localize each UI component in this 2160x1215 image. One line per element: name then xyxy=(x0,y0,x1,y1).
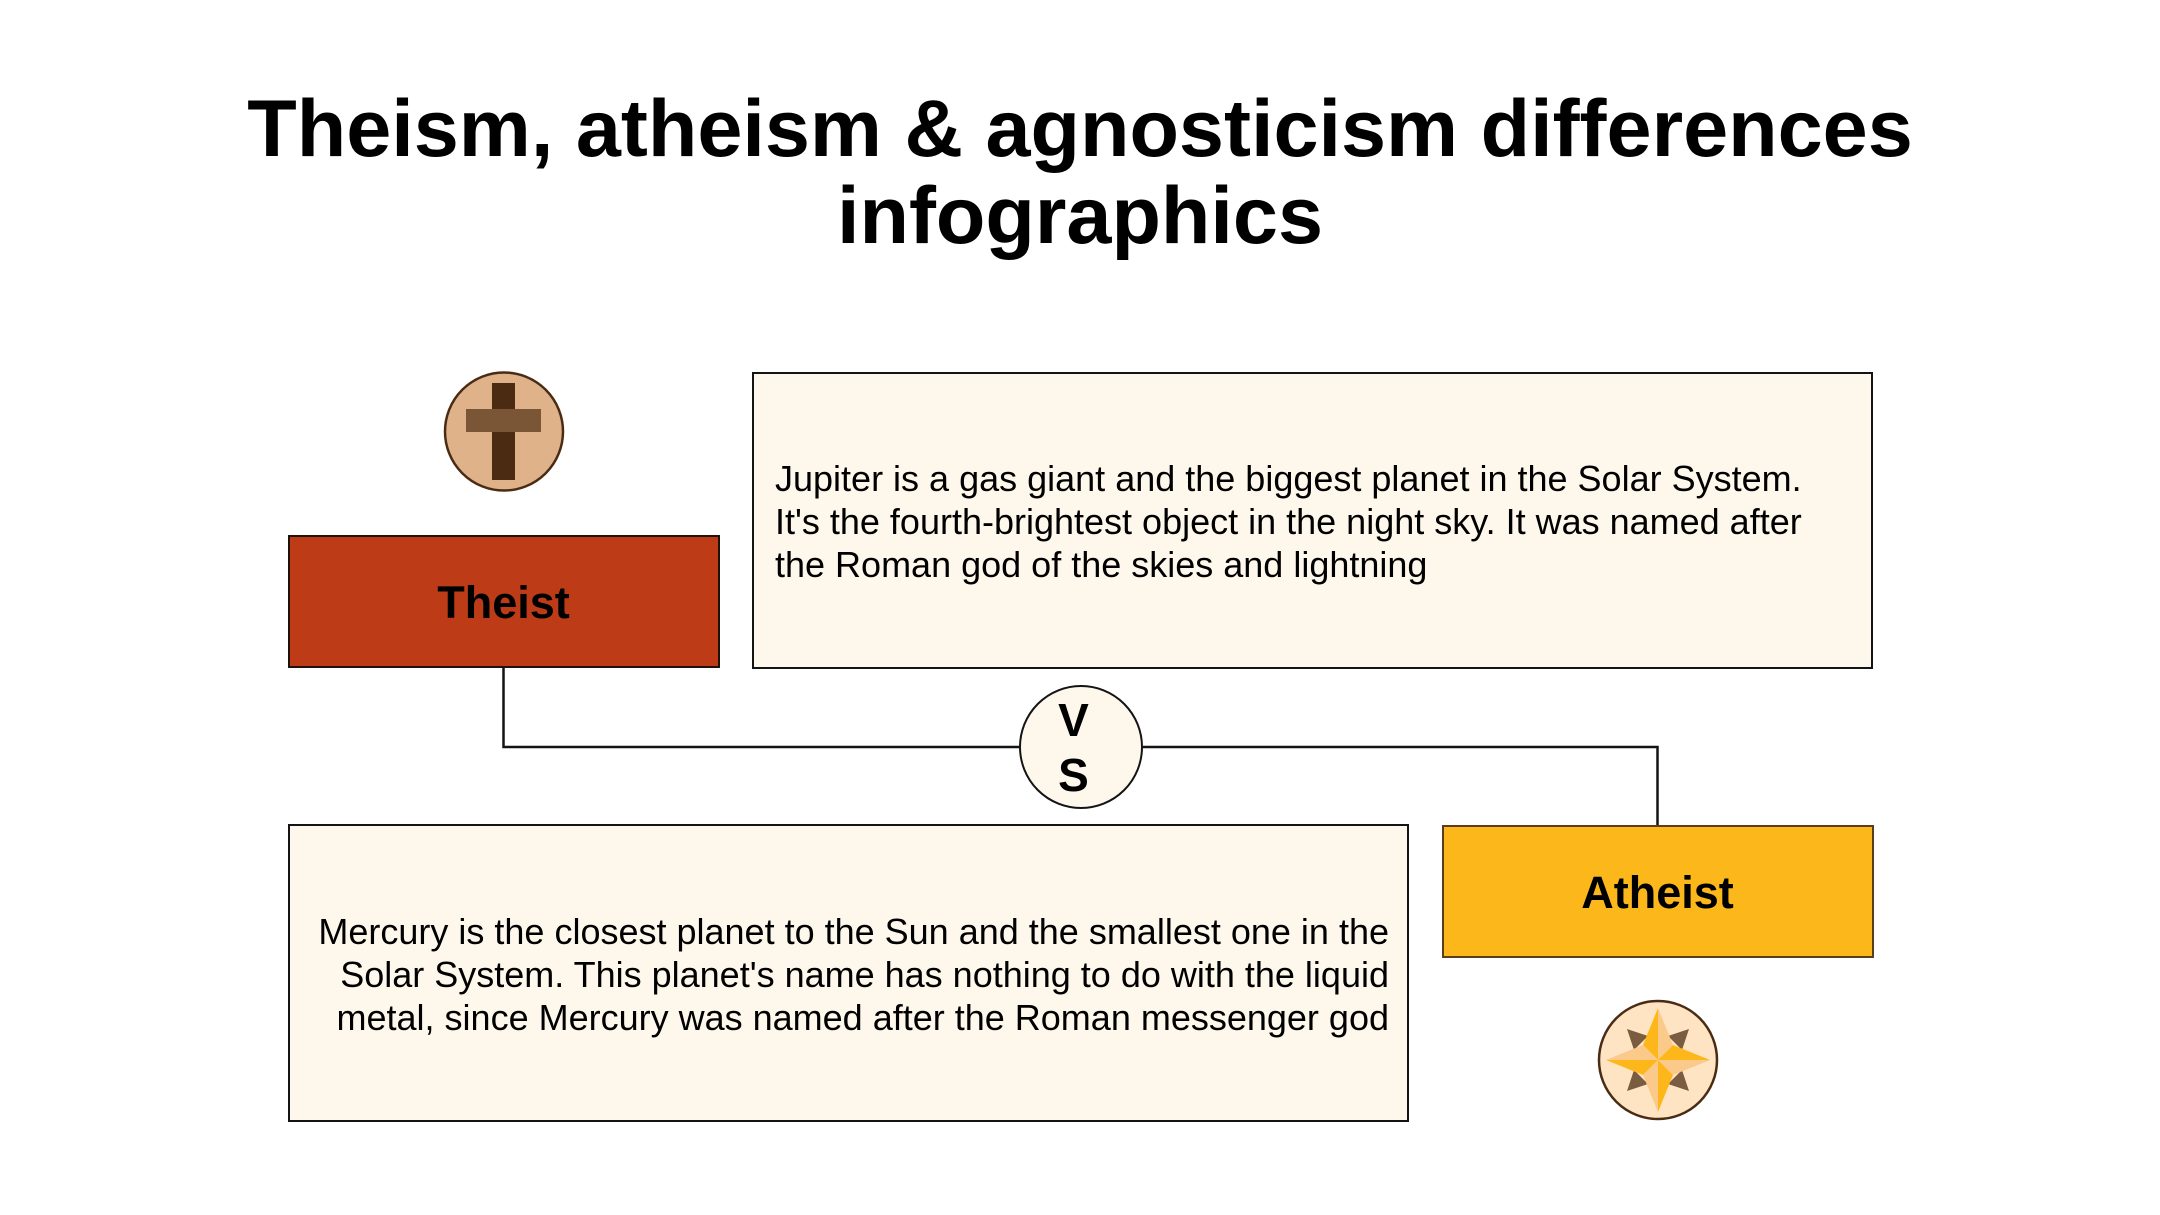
title: infographics xyxy=(837,171,1323,261)
text block: Jupiter xyxy=(775,458,1802,585)
panel: Mercury description xyxy=(288,824,1409,1122)
panel: Theist label xyxy=(288,535,720,668)
text block: Mercury: metal, since Mercury was named after the Roman messenger god xyxy=(337,996,1389,1038)
text block: Mercury: Mercury is the closest planet to the Sun and the smallest one in the xyxy=(318,910,1389,952)
title xyxy=(247,84,1913,261)
text block: Mercury: Solar System. This planet's name has nothing to do with the liquid xyxy=(340,954,1389,994)
text block: Jupiter: the Roman god of the skies and lightning xyxy=(775,544,1427,585)
title: Theism, atheism & agnosticism differences xyxy=(247,84,1913,174)
VS text xyxy=(1058,694,1089,800)
VS text: S xyxy=(1058,748,1089,800)
panel: Jupiter description xyxy=(752,372,1873,669)
VS badge xyxy=(1018,684,1143,809)
heading: Theist: Theist xyxy=(437,577,570,628)
text block: Jupiter: It's the fourth-brightest object in the night sky. It was named after xyxy=(775,501,1802,542)
text block: Mercury xyxy=(318,910,1389,1038)
heading: Atheist: Atheist xyxy=(1581,867,1734,918)
VS text: V xyxy=(1058,694,1089,746)
icon: cross xyxy=(444,371,564,492)
icon: compass star xyxy=(1598,1000,1718,1120)
panel: Atheist label xyxy=(1442,825,1874,958)
text block: Jupiter: Jupiter is a gas giant and the biggest planet in the Solar System. xyxy=(775,458,1802,499)
